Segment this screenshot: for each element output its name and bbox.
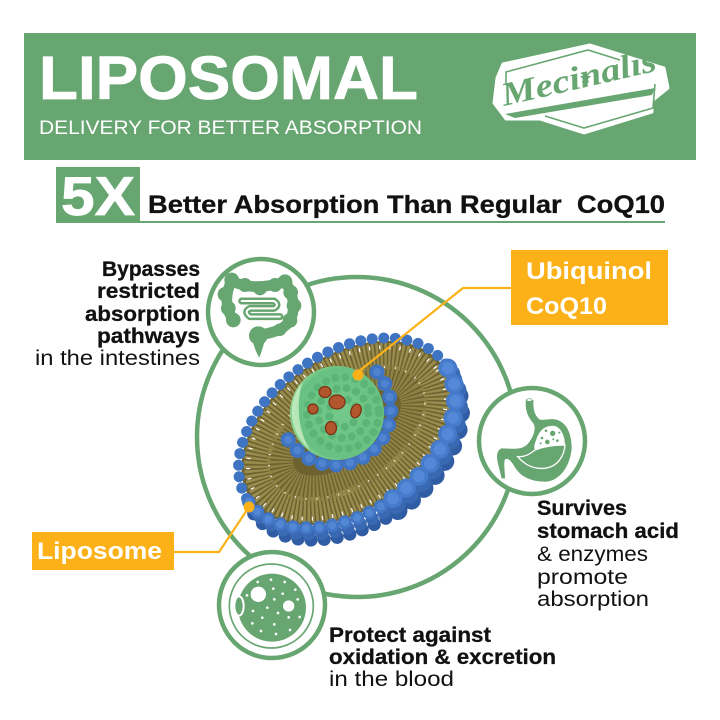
text: oxidation xyxy=(329,624,556,691)
callout: Ubiquinol CoQ10 xyxy=(352,250,668,380)
bilayer disc xyxy=(207,303,487,563)
icon circle: stomach xyxy=(479,388,585,494)
subtitle: DELIVERY FOR BETTER ABSORPTION xyxy=(39,117,422,139)
large ring xyxy=(197,277,517,597)
callout: Liposome: Liposome xyxy=(37,538,162,565)
5X headline xyxy=(56,165,665,227)
callout: Ubiquinol CoQ10: CoQ10 xyxy=(526,293,607,320)
text: oxidation: oxidation & excretion xyxy=(329,646,556,669)
logo: Mecinalis: Mecinalis xyxy=(497,43,660,114)
text: stomach acid: Survives xyxy=(537,497,627,520)
headline text: Better Absorption Than Regular CoQ10 xyxy=(148,191,665,219)
title: LIPOSOMAL xyxy=(39,44,418,112)
callout: Ubiquinol CoQ10: Ubiquinol xyxy=(526,258,652,285)
icon circle: intestines xyxy=(208,259,314,365)
CoQ10 particles xyxy=(308,386,363,434)
text: bypasses: restricted xyxy=(97,280,200,303)
text: stomach acid: & enzymes xyxy=(537,543,648,566)
text: stomach acid: promote xyxy=(537,566,628,589)
5X badge text: 5X xyxy=(61,165,135,227)
depth layers xyxy=(254,376,496,579)
icon circle: blood xyxy=(219,552,325,658)
text: oxidation: in the blood xyxy=(329,668,454,691)
text: bypasses xyxy=(35,258,200,370)
green core sphere xyxy=(290,366,384,460)
outer phospholipid rim xyxy=(203,299,491,567)
text: oxidation: Protect against xyxy=(329,624,491,647)
text: bypasses: Bypasses xyxy=(102,258,200,281)
liposome illustration xyxy=(203,299,496,579)
text: stomach acid: absorption xyxy=(537,588,649,611)
inner phospholipid ring xyxy=(283,372,391,465)
icon: blood cell xyxy=(229,564,313,648)
header banner xyxy=(24,33,696,160)
icon: intestines xyxy=(218,273,301,358)
text: bypasses: absorption xyxy=(85,303,200,326)
text: bypasses: pathways xyxy=(97,325,200,348)
text: stomach acid xyxy=(537,497,679,611)
text: stomach acid: stomach acid xyxy=(537,520,679,543)
logo: Mecinalis xyxy=(494,43,668,133)
callout: Liposome xyxy=(32,502,254,570)
icon: stomach xyxy=(497,399,572,482)
text: bypasses: in the intestines xyxy=(35,347,200,370)
